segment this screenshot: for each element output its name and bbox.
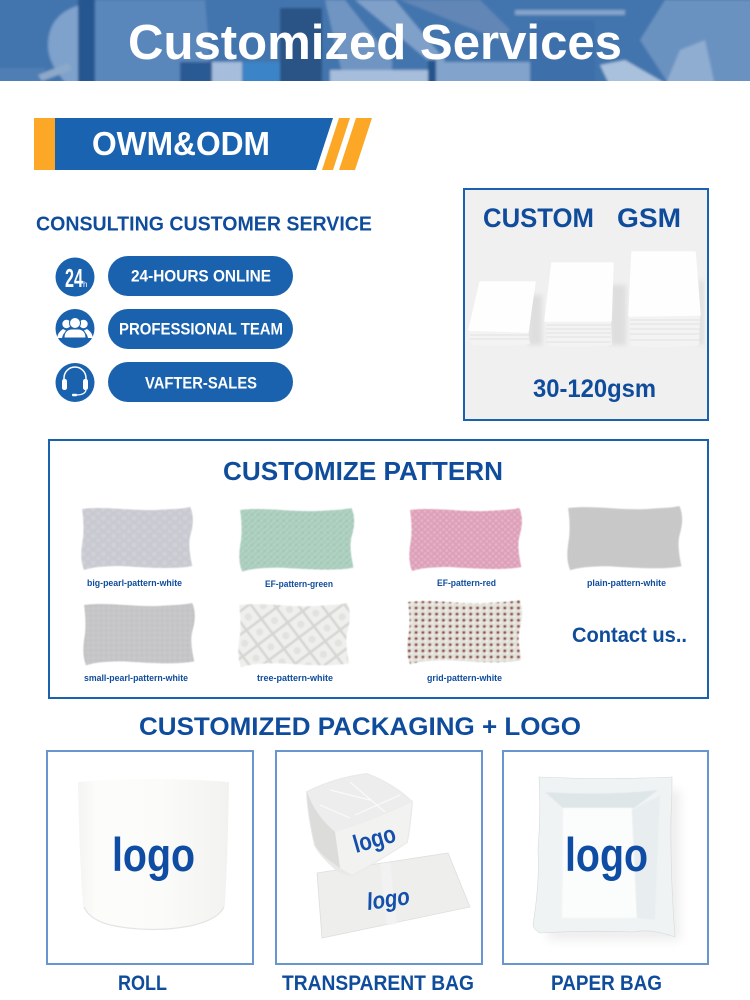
swatch: EF red [409, 508, 522, 588]
icon: 24 hours [56, 258, 94, 296]
panel: custom GSM [464, 189, 708, 420]
swatch: small pearl white: small-pearl-pattern-white [84, 673, 188, 683]
header banner [0, 0, 750, 86]
icon: headset [56, 363, 94, 402]
icon: team [56, 309, 94, 348]
pill: professional team [108, 309, 293, 349]
pill: professional team: PROFESSIONAL TEAM [119, 320, 283, 338]
swatch: big pearl white [81, 507, 193, 588]
GSM title: CUSTOM [483, 203, 594, 233]
contact note: Contact us.. [572, 624, 687, 647]
wipe stacks photo [469, 252, 704, 347]
swatch: EF green [239, 508, 354, 589]
section ribbon: OWM&ODM [34, 118, 372, 170]
panel: roll [47, 751, 253, 995]
roll logo: logo [112, 828, 195, 881]
ribbon label: OWM&ODM [92, 125, 270, 162]
GSM range: 30-120gsm [533, 375, 656, 403]
bag logo: logo [565, 828, 648, 881]
pill: 24-hours online [108, 256, 293, 296]
roll label: ROLL [118, 972, 167, 995]
roll illustration [78, 779, 229, 930]
swatch: big pearl white: big-pearl-pattern-white [87, 578, 182, 588]
service row: professional team [56, 309, 293, 349]
icon: 24 hours: h [83, 280, 87, 289]
pack logo: logo [350, 820, 399, 859]
flat sheet [317, 853, 470, 938]
panel: paper bag [503, 751, 708, 995]
swatch: plain white [567, 506, 682, 588]
swatch: EF red: EF-pattern-red [437, 578, 496, 588]
banner photo: factory machinery [0, 0, 750, 86]
heading: consulting customer service: CONSULTING CUSTOMER SERVICE [36, 212, 372, 236]
swatch: tree white: tree-pattern-white [257, 673, 333, 683]
pill: 24-hours online: 24-HOURS ONLINE [131, 266, 271, 286]
wrapped pack [307, 774, 412, 875]
swatch: EF green: EF-pattern-green [265, 579, 333, 589]
swatch: tree white [238, 603, 350, 683]
pill: after-sales: VAFTER-SALES [145, 374, 257, 392]
swatch: grid white [407, 600, 522, 683]
GSM title: GSM [617, 203, 681, 233]
bag illustration [533, 777, 680, 940]
swatch: grid white: grid-pattern-white [427, 673, 502, 683]
sheet logo: logo [365, 883, 411, 916]
service row: 24-hours online [56, 256, 293, 296]
pill: after-sales [108, 362, 293, 402]
service row: after-sales [56, 362, 293, 402]
transparent bag label: TRANSPARENT BAG [282, 972, 474, 995]
paper bag label: PAPER BAG [551, 972, 662, 995]
panel: transparent bag [276, 751, 482, 995]
panel: customize pattern [49, 440, 708, 698]
icon: 24 hours: 24 [65, 263, 83, 293]
GSM title [483, 203, 681, 233]
pattern heading: CUSTOMIZE PATTERN [223, 456, 503, 486]
banner title: Customized Services [128, 16, 622, 70]
swatch: plain white: plain-pattern-white [587, 578, 666, 588]
heading: customized packaging and logo: CUSTOMIZED PACKAGING + LOGO [139, 713, 581, 741]
swatch: small pearl white [83, 603, 195, 683]
